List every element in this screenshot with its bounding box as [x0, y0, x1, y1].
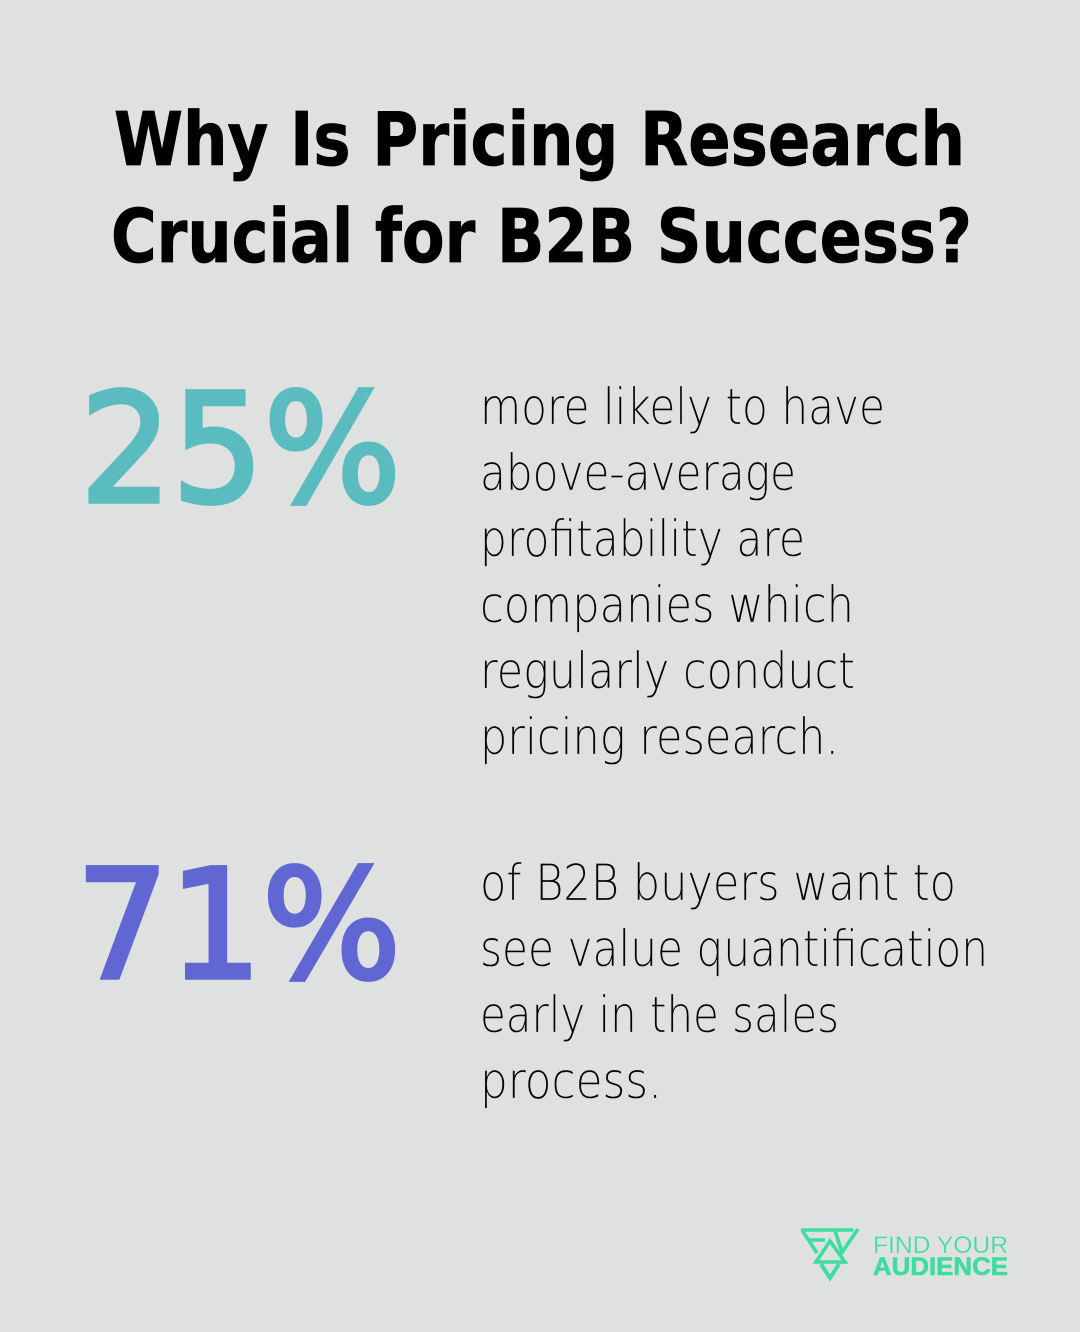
text block: 71% description: see value quantification [480, 920, 988, 978]
wordmark [873, 1232, 1008, 1281]
logo: Find Your Audience [801, 1229, 1008, 1281]
text block: 25% description: pricing research. [480, 708, 839, 766]
text block: 25% description: more likely to have [480, 378, 885, 436]
text block: 25% description: above-average [480, 444, 796, 502]
text block: 71% description: early in the sales [480, 986, 839, 1044]
stat number: 25%: 25% [80, 362, 401, 538]
text block: 71% description: process. [480, 1052, 662, 1110]
text block: 25% description [480, 378, 885, 766]
wordmark: AUDIENCE [873, 1253, 1008, 1281]
stat number: 71%: 71% [76, 838, 401, 1014]
wordmark: FIND YOUR [873, 1232, 1008, 1259]
text block: 25% description: profitability are [480, 510, 805, 568]
text block: 25% description: companies which [480, 576, 854, 634]
text block: 25% description: regularly conduct [480, 642, 855, 700]
panel: statistic 25% [80, 362, 885, 766]
panel: statistic 71% [76, 838, 988, 1110]
icon: triangle logo mark [801, 1229, 858, 1278]
text block: 71% description: of B2B buyers want to [480, 854, 956, 912]
title [111, 97, 972, 280]
text block: 71% description [480, 854, 988, 1110]
